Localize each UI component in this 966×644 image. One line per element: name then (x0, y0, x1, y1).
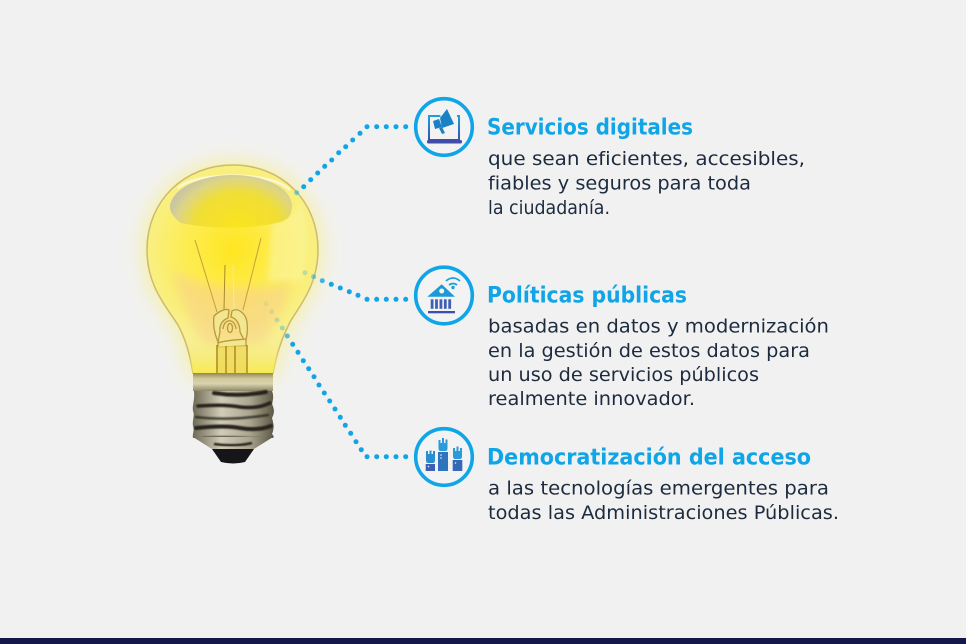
icon ring (416, 267, 472, 324)
text: servicios digitales: la ciudadanía. (488, 197, 610, 219)
text: democratización: todas las Administraciones Públicas. (488, 502, 839, 524)
warm orange area (172, 270, 292, 345)
megaphone gap (440, 106, 457, 122)
heading: democratización: Democratización del acceso (487, 444, 811, 470)
filament stems (216, 345, 247, 373)
light bulb illustration (147, 165, 318, 464)
metal collar (193, 373, 273, 391)
footer bar (0, 638, 966, 644)
filament wires (195, 238, 261, 312)
wifi arcs (446, 278, 460, 288)
filament holder (214, 309, 247, 347)
bulb glass (147, 165, 318, 373)
middle hand (438, 438, 448, 471)
text: políticas públicas: realmente innovador. (488, 388, 695, 410)
text: servicios digitales: que sean eficientes, accesibles, (488, 148, 805, 170)
glass highlight (178, 176, 290, 190)
thread shadows (196, 392, 271, 439)
megaphone (433, 109, 454, 134)
pediment roundel (439, 288, 444, 294)
text: democratización: a las tecnologías emergentes para (488, 478, 829, 500)
cone band (214, 443, 252, 445)
icon ring (416, 429, 472, 485)
right light panel (268, 202, 308, 281)
base cone (193, 437, 273, 449)
icon: bank with wifi (416, 267, 472, 324)
glass reflection (170, 175, 292, 228)
icon: megaphone on laptop (416, 99, 472, 155)
pediment (427, 284, 455, 297)
black contact tip (212, 449, 254, 464)
heading: servicios digitales: Servicios digitales (487, 114, 693, 140)
dotted connector: políticas públicas (302, 270, 408, 302)
heading: políticas públicas: Políticas públicas (487, 282, 687, 308)
columns (428, 299, 455, 313)
dotted connector: servicios digitales (294, 124, 408, 195)
text: políticas públicas: un uso de servicios públicos (488, 364, 759, 386)
laptop screen (429, 116, 459, 140)
text: políticas públicas (488, 316, 829, 410)
left hand (426, 450, 435, 471)
laptop base (427, 140, 462, 144)
text: políticas públicas: basadas en datos y modernización (488, 316, 829, 338)
text: políticas públicas: en la gestión de estos datos para (488, 340, 810, 362)
text: servicios digitales (488, 148, 805, 219)
icon: raised hands (416, 429, 472, 485)
screw thread (193, 391, 274, 438)
icon ring (416, 99, 472, 155)
text: servicios digitales: fiables y seguros para toda (488, 172, 751, 194)
dotted connector: democratización (264, 301, 408, 459)
right hand (453, 446, 462, 471)
bulb glow (147, 165, 318, 373)
neck light (186, 335, 282, 373)
text: democratización (488, 478, 839, 524)
